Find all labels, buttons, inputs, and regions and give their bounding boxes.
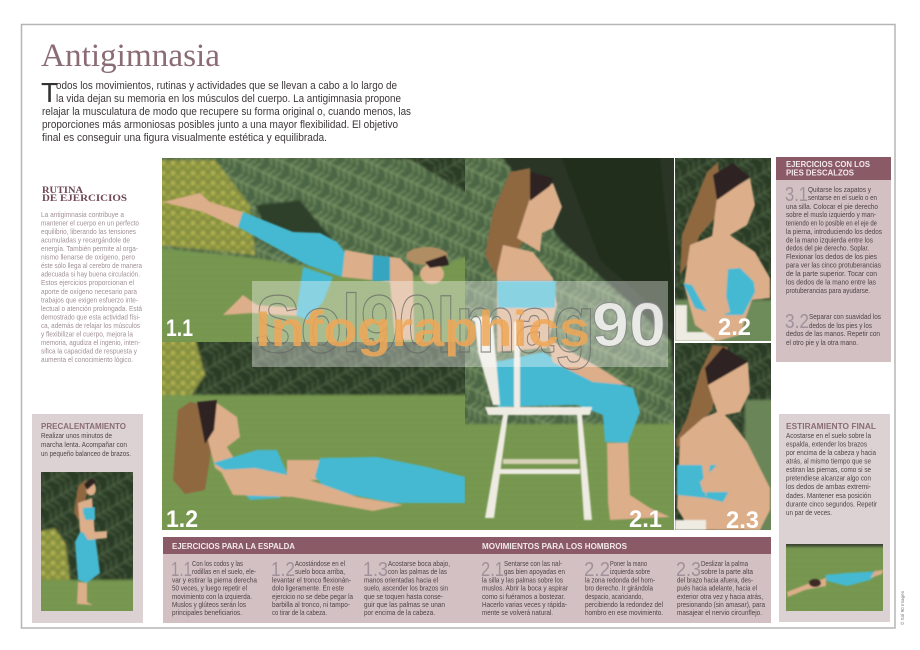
step 1.1: 1.1 <box>171 559 192 581</box>
text: estiramiento body: Acostarse en el suelo sobre la <box>786 431 871 440</box>
step 3.2 <box>785 311 881 347</box>
step 1.1: Muslos y glúteos serán los <box>172 600 246 609</box>
text: estiramiento body: espalda, extender los brazos <box>786 440 867 448</box>
photo number labels: 2.3 <box>726 507 759 534</box>
text: estiramiento body: por encima de la cabeza y hacia <box>786 448 876 457</box>
step 2.1: Hacerlo varias veces y rápida- <box>482 600 568 609</box>
step 3.1: los dedos de la mano entre las <box>786 277 876 286</box>
step 3.2: dedos de los pies y los <box>809 321 872 330</box>
photo: exercise 2.3 <box>675 343 771 530</box>
step 1.2: Acostándose en el <box>295 559 345 568</box>
step 2.2: percibiendo la redondez del <box>585 600 663 609</box>
text: rutina body: lectual o atención prolongada. Está <box>41 305 142 313</box>
step 2.1: 2.1 <box>481 559 504 581</box>
step 3.2: dedos de las manos. Repetir con <box>786 329 880 338</box>
step 1.3: manos orientadas hacia el <box>364 576 438 584</box>
title: Antigimnasia <box>41 38 220 74</box>
text: rutina body: La antigimnasia contribuye a <box>41 211 124 219</box>
step 3.1: Flexionar los dedos de los pies <box>786 252 877 261</box>
text: rutina body: adecuada si hay buena circulación. <box>41 271 140 279</box>
text: rutina body: trabajos que exigen esfuerzo inte- <box>41 296 139 304</box>
step 1.2: co tirar de la cabeza. <box>272 608 327 617</box>
step 1.1: movimiento con la izquierda. <box>172 592 252 601</box>
intro paragraph: final es conseguir una figura visualmente estética y equilibrada. <box>42 132 327 144</box>
heading: rutina: RUTINA <box>42 185 84 195</box>
text: rutina body: aporte de oxígeno necesario para <box>41 288 137 296</box>
step 1.3: Acostarse boca abajo, <box>388 559 450 568</box>
step 2.1: la silla y las palmas sobre los <box>482 576 563 584</box>
step 1.1: principales beneficiarios. <box>172 608 242 617</box>
step 3.1: la pierna, introduciendo los dedos <box>786 227 882 236</box>
step 2.1: mente se volverá natural. <box>482 608 553 617</box>
text: precalentamiento body <box>41 431 131 458</box>
step 2.1 <box>481 559 569 617</box>
text: estiramiento body: durante cinco segundos. Repetir <box>786 499 878 508</box>
step 2.2: 2.2 <box>584 559 610 581</box>
text: estiramiento body: dades. Mantener esa posición <box>786 491 871 500</box>
photo number labels: 2.2 <box>718 314 751 341</box>
step 1.1: rodillas en el suelo, ele- <box>192 567 257 576</box>
step 3.1: de la mano izquierda entre los <box>786 235 873 244</box>
text: estiramiento body: atrás, al mismo tiempo que se <box>786 457 871 466</box>
panel: ejercicios para la espalda y movimientos para los hombros <box>163 537 771 623</box>
photo number labels <box>166 314 759 534</box>
intro paragraph: relajar la musculatura de modo que recupere su forma original o, cuando menos, las <box>42 106 411 118</box>
text: estiramiento body: los dedos de ambas extremi- <box>786 482 872 491</box>
step 3.1: sobre el muslo izquierdo y man- <box>786 210 877 219</box>
step 3.1: dedos del pie derecho. Soplar. <box>786 244 869 253</box>
photo: woman walking <box>38 470 136 614</box>
step 2.2: la zona redonda del hom- <box>585 576 656 584</box>
text: rutina body: memoria, agudiza el ingenio, inten- <box>41 339 141 347</box>
heading: movimientos para los hombros: MOVIMIENTOS PARA LOS HOMBROS <box>482 541 627 551</box>
text: estiramiento body: estiran las piernas, como si se <box>786 465 871 474</box>
step 2.1: como si fuéramos a bostezar. <box>482 592 565 601</box>
text: rutina body: ca, además de relajar los músculos <box>41 322 140 330</box>
text: rutina body: nismo llenarse de oxígeno, pero <box>41 254 135 262</box>
text: precalentamiento body: Realizar unos minutos de <box>41 431 112 440</box>
photo: exercise 1.1 <box>158 154 470 346</box>
step 1.2 <box>271 559 353 617</box>
step 1.1: var y estirar la pierna derecha <box>172 576 257 584</box>
text: precalentamiento body: un pequeño balanceo de brazos. <box>41 449 131 458</box>
panel: precalentamiento <box>32 414 143 623</box>
photo: exercise 1.2 <box>158 338 469 534</box>
step 2.2: izquierda sobre <box>610 567 650 576</box>
panel: ejercicios con los pies descalzos <box>776 157 891 362</box>
step 3.1: de la parte superior. Tocar con <box>786 269 877 278</box>
step 3.2: el otro pie y la otra mano. <box>786 338 858 347</box>
intro paragraph: odos los movimientos, rutinas y actividades que se llevan a cabo a lo largo de <box>56 80 397 92</box>
step 2.2: bro derecho. Ir girándola <box>585 584 653 593</box>
step 2.3 <box>676 559 765 617</box>
text: rutina body: sifica la capacidad de respuesta y <box>41 348 137 356</box>
text: estiramiento body <box>786 431 878 517</box>
step 3.1: para ver las cinco protuberancias <box>786 260 881 270</box>
step 2.3: pués hacia adelante, hacia el <box>677 584 757 593</box>
step 2.2 <box>584 559 663 617</box>
heading: rutina <box>42 185 127 203</box>
text: rutina body: energía. También permite al orga- <box>41 245 139 253</box>
step 3.1: sentarse en el suelo o en <box>808 193 877 202</box>
step 1.3 <box>363 559 450 617</box>
step 1.1: 50 veces, y luego repetir el <box>172 584 247 593</box>
step 3.2: Separar con suavidad los <box>809 312 881 321</box>
text: rutina body: Estos ejercicios proporcionan el <box>41 279 134 287</box>
text: estiramiento body: un par de veces. <box>786 508 832 517</box>
step 2.2: despacio, acariciando, <box>585 592 643 601</box>
watermark: Sol90 Images Infographics90: 90 <box>592 291 666 360</box>
intro paragraph: proporciones más armoniosas posibles junto a una mayor flexibilidad. El objetivo <box>42 119 398 131</box>
credit: © Sol 90 Images <box>899 590 905 625</box>
heading: pies descalzos: EJERCICIOS CON LOS <box>786 159 870 169</box>
text: rutina body: demostrado que esta actividad físi- <box>41 313 141 321</box>
watermark: Sol90 Images Infographics90: Sol90Imag <box>255 279 595 370</box>
step 3.1 <box>785 184 882 295</box>
watermark: Sol90 Images Infographics90: Infographics <box>255 301 590 357</box>
step 1.2: barbilla al tronco, ni tampo- <box>272 600 351 609</box>
step 2.1: gas bien apoyadas en <box>504 567 565 576</box>
step 2.3: sobre la parte alta <box>701 567 753 576</box>
step 1.3: 1.3 <box>363 559 388 581</box>
photo number labels: 2.1 <box>629 506 662 533</box>
step 1.2: suelo boca arriba, <box>295 567 345 576</box>
step 2.2: hombro en ese movimiento. <box>585 608 663 617</box>
step 2.3: 2.3 <box>676 559 701 581</box>
step 2.3: del brazo hacia afuera, des- <box>677 576 754 584</box>
text: estiramiento body: pretendiese alcanzar algo con <box>786 474 871 483</box>
step 2.2: Poner la mano <box>610 559 647 568</box>
step 3.1: una silla. Colocar el pie derecho <box>786 202 878 211</box>
step 1.3: por encima de la cabeza. <box>364 608 435 617</box>
step 2.3: masajear el nervio circunflejo. <box>677 608 762 617</box>
step 1.3: suelo, ascender los brazos sin <box>364 584 448 593</box>
photo number labels: 1.2 <box>166 506 198 533</box>
intro paragraph: la vida dejan su memoria en los músculos del cuerpo. La antigimnasia propone <box>56 93 401 105</box>
text: rutina body: y flexibilizar el cuerpo, mejora la <box>41 330 133 338</box>
step 1.2: levantar el tronco flexionán- <box>272 576 352 584</box>
heading: ejercicios para la espalda: EJERCICIOS PARA LA ESPALDA <box>172 541 295 551</box>
step 1.2: ejercicio no se debe pegar la <box>272 592 353 601</box>
step 1.1: Con los codos y las <box>192 559 243 568</box>
step 3.1: teniendo en lo posible en el eje de <box>786 218 877 228</box>
text: rutina body: equilibrio, liberando las tensiones <box>41 228 136 236</box>
step 1.2: 1.2 <box>271 559 295 581</box>
heading: precalentamiento: PRECALENTAMIENTO <box>41 422 126 431</box>
text: rutina body: aumenta el conocimiento lógico. <box>41 356 133 364</box>
step 2.3: exterior otra vez y hacia atrás, <box>677 592 763 601</box>
panel: rutina de ejercicios <box>41 185 142 364</box>
intro paragraph: T <box>41 77 58 108</box>
heading: estiramiento final: ESTIRAMIENTO FINAL <box>786 422 876 431</box>
photo: exercise 2.1 <box>461 154 678 534</box>
panel: estiramiento final <box>779 414 890 622</box>
text: rutina body <box>41 211 142 364</box>
step 1.3: con las palmas de las <box>388 567 447 576</box>
heading: pies descalzos <box>786 159 870 178</box>
photo number labels: 1.1 <box>166 315 193 342</box>
step 2.1: muslos. Abrir la boca y aspirar <box>482 584 569 593</box>
step 3.1: 3.1 <box>785 184 808 206</box>
step 1.3: guir que las palmas se unan <box>364 600 445 609</box>
step 1.1 <box>171 559 257 617</box>
intro paragraph <box>41 77 411 144</box>
step 2.1: Sentarse con las nal- <box>504 559 563 568</box>
step 3.1: protuberancias para ayudarse. <box>786 286 870 295</box>
step 3.1: Quitarse los zapatos y <box>808 185 871 194</box>
step 2.3: Deslizar la palma <box>701 559 748 568</box>
text: rutina body: éste sólo llega al cerebro de manera <box>41 262 142 270</box>
step 1.3: que se toquen hasta conse- <box>364 592 444 601</box>
heading: pies descalzos: PIES DESCALZOS <box>786 168 854 178</box>
step 3.2: 3.2 <box>785 311 809 333</box>
text: rutina body: acumuladas y recargándole de <box>41 237 130 245</box>
heading: rutina: DE EJERCICIOS <box>42 193 127 203</box>
text: precalentamiento body: marcha lenta. Acompañar con <box>41 440 127 449</box>
photo: woman stretching on grass <box>786 544 883 611</box>
step 1.2: dolo ligeramente. En este <box>272 584 344 593</box>
text: rutina body: mantener el cuerpo en un perfecto <box>41 220 139 228</box>
photo: exercise 2.2 <box>675 158 771 341</box>
step 2.3: presionando (sin amasar), para <box>677 600 765 609</box>
